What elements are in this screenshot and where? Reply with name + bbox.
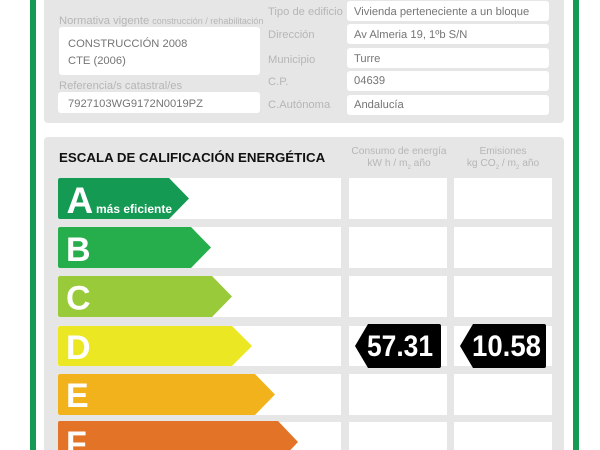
arrow B: B xyxy=(66,231,91,269)
column header: consumo xyxy=(351,146,447,171)
column header: emisiones xyxy=(467,146,539,171)
value tag: consumo xyxy=(355,324,441,368)
field: normativa: CONSTRUCCIÓN 2008 xyxy=(68,38,187,50)
field: tipo de edificio: Vivienda perteneciente a un bloque xyxy=(354,6,529,18)
arrow A: más eficiente xyxy=(96,202,172,216)
column header: consumo: Consumo de energía xyxy=(351,146,447,157)
field: codigo postal: 04639 xyxy=(354,75,385,87)
field: normativa xyxy=(59,27,260,75)
label: tipo de edificio: Tipo de edificio xyxy=(268,6,343,18)
panel: building data xyxy=(44,0,564,123)
field: normativa: CTE (2006) xyxy=(68,55,126,67)
label: referencia catastral: Referencia/s catastral/es xyxy=(59,80,182,92)
field: referencia catastral: 7927103WG9172N0019PZ xyxy=(68,98,203,110)
label: normativa vigente: Normativa vigente construcción / rehabilitación xyxy=(59,15,263,27)
label: municipio: Municipio xyxy=(268,54,315,66)
field: municipio xyxy=(347,48,549,68)
arrow A xyxy=(58,178,189,221)
field: comunidad autonoma: Andalucía xyxy=(354,99,404,111)
column header: emisiones: Emisiones xyxy=(480,146,526,157)
arrow C: C xyxy=(66,280,91,318)
field: direccion: Av Almeria 19, 1ºb S/N xyxy=(354,29,467,41)
label: comunidad autonoma: C.Autónoma xyxy=(268,99,330,111)
column header: emisiones: kg CO2 / m2 año xyxy=(467,158,539,171)
arrow B xyxy=(58,227,211,269)
field: direccion xyxy=(347,24,549,44)
right green border xyxy=(573,0,579,450)
field: comunidad autonoma xyxy=(347,95,549,115)
arrow E xyxy=(58,374,275,415)
arrow F xyxy=(58,421,298,450)
field: referencia catastral xyxy=(58,92,260,113)
arrow A: A xyxy=(66,180,93,221)
arrow D: D xyxy=(66,329,91,367)
field: tipo de edificio xyxy=(347,1,549,21)
arrow E: E xyxy=(66,377,89,415)
left green border xyxy=(30,0,36,450)
value tag: emisiones: 10.58 xyxy=(472,330,541,363)
heading: escala: ESCALA DE CALIFICACIÓN ENERGÉTICA xyxy=(59,150,325,165)
panel: energy rating scale xyxy=(44,137,564,450)
field: codigo postal xyxy=(347,71,549,91)
label: direccion: Dirección xyxy=(268,29,315,41)
value tag: emisiones xyxy=(460,324,546,368)
arrow C xyxy=(58,276,232,318)
column header: consumo: kW h / m2 año xyxy=(367,158,431,171)
field: municipio: Turre xyxy=(354,53,380,65)
value tag: consumo: 57.31 xyxy=(367,330,433,363)
arrow D xyxy=(58,326,252,367)
label: codigo postal: C.P. xyxy=(268,76,288,88)
